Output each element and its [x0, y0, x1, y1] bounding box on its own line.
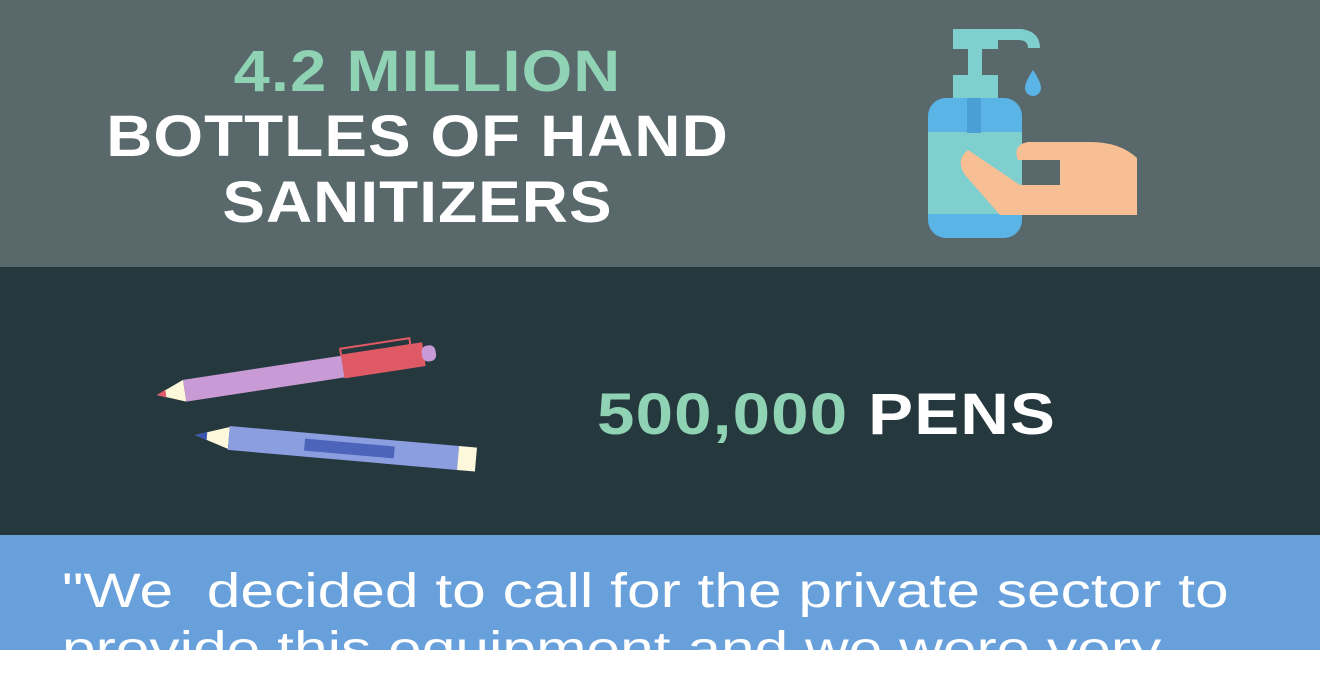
text: quote: provide this equipment and we were very	[62, 623, 1161, 676]
text: quote: "We decided to call for the private sector to	[62, 565, 1229, 618]
text: 500,000 pens: 500,000 PENS	[597, 382, 1056, 447]
icon: pens	[157, 337, 477, 472]
icon: sanitizer bottle and hand	[928, 29, 1137, 238]
text: bottles of hand sanitizers: SANITIZERS	[222, 170, 613, 235]
panel: pens	[0, 267, 1320, 535]
text: bottles of hand sanitizers: BOTTLES OF HAND	[106, 104, 729, 169]
text: bottles of hand sanitizers	[106, 104, 729, 235]
panel: quote	[0, 535, 1320, 650]
panel: hand sanitizers	[0, 0, 1320, 267]
heading: 4.2 million: 4.2 MILLION	[234, 39, 621, 104]
text: quote	[62, 565, 1229, 676]
